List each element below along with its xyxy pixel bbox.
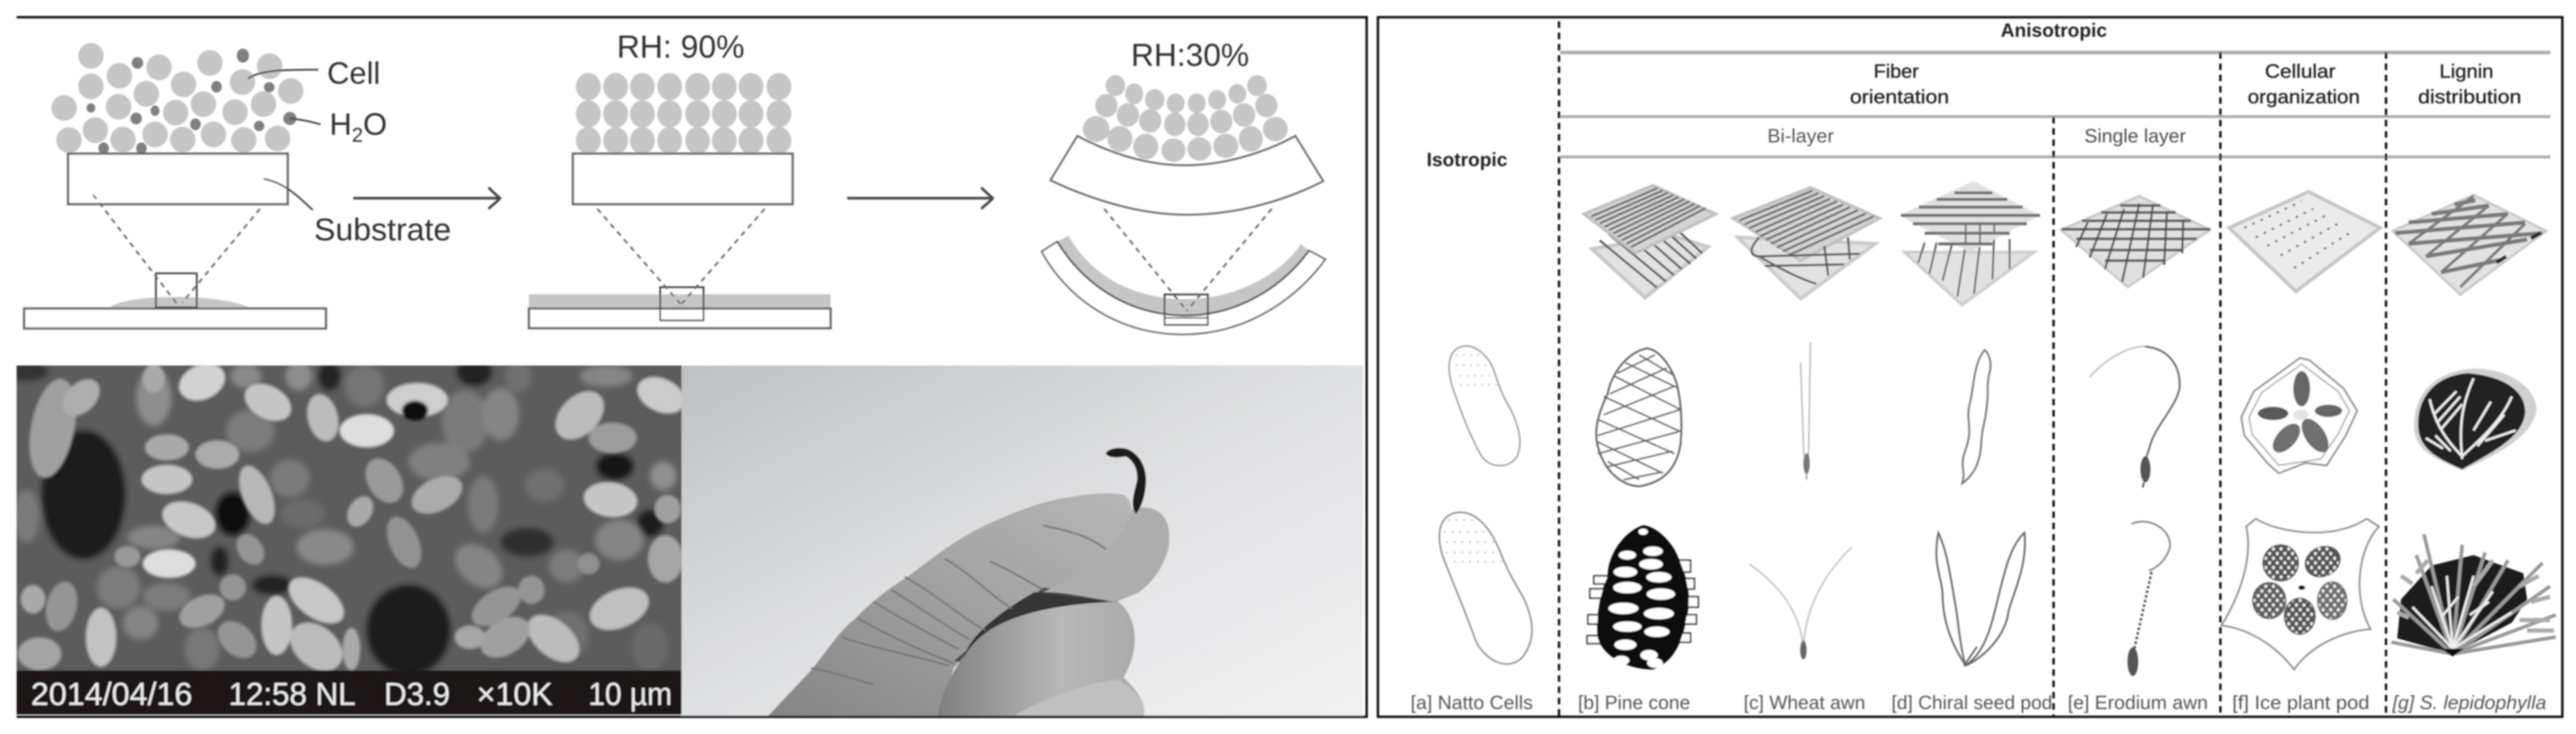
icon: wheat awn closed xyxy=(1801,342,1811,479)
icon: lignin distribution tile xyxy=(2393,195,2546,294)
finger crease xyxy=(963,592,1117,661)
column heading: Cellular organization xyxy=(2248,61,2360,107)
label: H2O: 2 xyxy=(352,124,363,147)
icon: pine cone open xyxy=(1587,525,1699,669)
heading: Isotropic: Isotropic xyxy=(1427,149,1507,170)
caption row xyxy=(1411,692,2546,713)
icon: ice plant pod closed xyxy=(2241,358,2357,474)
icon: bi-layer fibers tile 1 xyxy=(1584,185,1716,298)
label: H2O: O xyxy=(363,107,387,142)
icon: bi-layer fibers tile 2 xyxy=(1733,188,1880,299)
panel: natto cell actuator xyxy=(4,17,1367,717)
caption row: [a] Natto Cells xyxy=(1411,692,1533,713)
column heading: Fiber orientation: orientation xyxy=(1850,86,1949,107)
icon: Selaginella closed xyxy=(2414,368,2537,471)
dashed column dividers xyxy=(1559,21,2386,717)
arrow: stage 2 to stage 3 xyxy=(847,188,993,209)
table rules xyxy=(1560,52,2550,157)
column heading: Lignin distribution: Lignin xyxy=(2439,61,2493,82)
column heading: Cellular organization: organization xyxy=(2248,86,2360,107)
icon: Selaginella open xyxy=(2391,534,2556,656)
icon: erodium awn closed xyxy=(2090,347,2179,488)
substrate and zoom cone xyxy=(529,154,831,328)
sub heading: Bi-layer: Bi-layer xyxy=(1767,125,1834,147)
column heading: Cellular organization: Cellular xyxy=(2265,61,2336,82)
caption row: [g] S. lepidophylla xyxy=(2392,692,2546,713)
arrow: stage 1 to stage 2 xyxy=(353,188,500,209)
curled film sample xyxy=(1105,448,1146,514)
column heading: Lignin distribution xyxy=(2418,61,2521,107)
glove wrinkles xyxy=(811,526,1105,685)
icon: single layer fibers tile xyxy=(2061,196,2210,287)
icon: chiral seed pod closed xyxy=(1962,350,1991,484)
label: Cell: Cell xyxy=(327,56,381,91)
photo: SEM micrograph of natto cells xyxy=(4,357,693,714)
icon: erodium awn open xyxy=(2128,522,2170,676)
heading: Anisotropic: Anisotropic xyxy=(2001,20,2107,41)
ring finger xyxy=(1016,680,1144,716)
caption row: [b] Pine cone xyxy=(1578,692,1690,713)
label: H2O: H xyxy=(329,107,352,142)
caption row: [f] Ice plant pod xyxy=(2232,692,2369,713)
stage 1: cells with water on substrate xyxy=(24,43,451,329)
photo: gloved fingers holding curled film xyxy=(682,366,1363,716)
icon: pine cone closed xyxy=(1596,348,1681,486)
caption row: [e] Erodium awn xyxy=(2068,692,2208,713)
icon: natto cell, dry state xyxy=(1440,512,1532,664)
middle finger xyxy=(938,600,1144,716)
caption row: [c] Wheat awn xyxy=(1744,692,1865,713)
icon: chiral seed pod open xyxy=(1937,533,2025,666)
panel: anisotropic classification table xyxy=(1378,17,2562,717)
stage 2: RH 90 percent xyxy=(529,29,831,328)
info text: 12:58 NL xyxy=(229,676,356,712)
label: RH 30%: RH:30% xyxy=(1131,37,1249,73)
icon: packed cells xyxy=(576,73,791,154)
column heading: Fiber orientation: Fiber xyxy=(1874,61,1919,82)
panel border xyxy=(17,17,1367,717)
stage 3: RH 30 percent xyxy=(1042,37,1325,334)
icon: natto cell, moist state xyxy=(1449,346,1520,466)
sub heading: Single layer: Single layer xyxy=(2084,125,2186,147)
substrate and zoom cone xyxy=(24,69,326,329)
column heading: Lignin distribution: distribution xyxy=(2418,86,2521,107)
thumb xyxy=(1043,508,1170,602)
info text: D3.9 xyxy=(384,676,450,712)
column heading: Fiber orientation xyxy=(1850,61,1949,107)
info text: 10 µm xyxy=(588,676,672,712)
info text: 2014/04/16 xyxy=(31,676,192,712)
panel border xyxy=(1378,17,2562,717)
icon: bi-layer fibers tile 3 xyxy=(1899,181,2040,305)
index finger xyxy=(768,493,1132,716)
icon: cellular organization tile xyxy=(2229,192,2380,291)
icon: bent cell layer and substrate xyxy=(1042,75,1325,334)
info text xyxy=(31,676,672,712)
label: RH 90%: RH: 90% xyxy=(617,29,744,65)
SEM image xyxy=(4,357,693,675)
icon: scattered cells xyxy=(52,43,303,154)
finger gap shadow xyxy=(954,587,1117,663)
icon: wheat awn open xyxy=(1750,547,1852,659)
info text: ×10K xyxy=(477,676,553,712)
label: Substrate: Substrate xyxy=(314,212,451,247)
caption row: [d] Chiral seed pod xyxy=(1891,692,2052,713)
info bar xyxy=(17,671,682,714)
icon: ice plant pod open xyxy=(2222,519,2379,669)
